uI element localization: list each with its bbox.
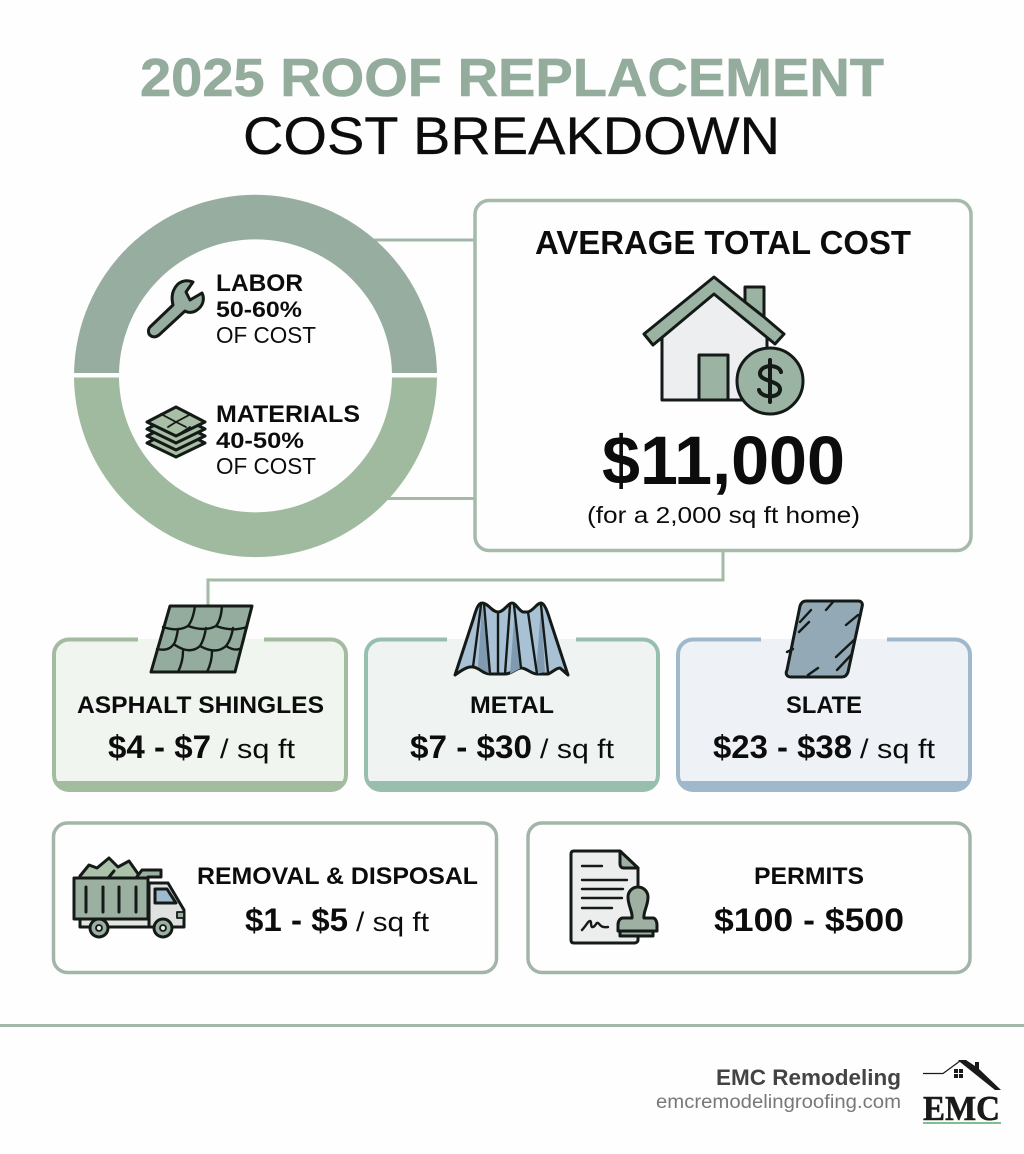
text: labor share: 50-60% <box>216 297 302 322</box>
panel: asphalt shingles <box>54 606 346 791</box>
price: metal: $7 - $30 <box>410 729 532 765</box>
icon: wrench <box>148 281 203 337</box>
text: labor share <box>216 270 316 348</box>
price: metal <box>410 729 615 765</box>
price: metal: / sq ft <box>540 734 615 764</box>
text: materials share: MATERIALS <box>216 401 360 428</box>
icon: slate tile <box>786 601 862 677</box>
panel: slate <box>678 601 970 791</box>
title <box>140 48 884 166</box>
footer divider <box>0 1024 1024 1027</box>
heading: average total cost: AVERAGE TOTAL COST <box>535 224 911 261</box>
value: total cost: $11,000 <box>602 422 845 499</box>
icon: shingles <box>151 606 252 672</box>
price: asphalt shingles: $4 - $7 <box>108 729 211 765</box>
price: asphalt shingles: / sq ft <box>220 734 296 764</box>
panel: average total cost <box>475 200 971 550</box>
caption: home size: (for a 2,000 sq ft home) <box>587 502 860 528</box>
title: 2025 ROOF REPLACEMENT <box>140 48 884 108</box>
price: slate <box>713 729 936 765</box>
price: removal and disposal: / sq ft <box>356 907 430 937</box>
price: slate: / sq ft <box>860 734 936 764</box>
text: materials share: OF COST <box>216 453 316 479</box>
price: removal and disposal <box>245 902 430 938</box>
icon: metal panel <box>455 603 568 675</box>
footer: company name and website: emcremodelingroofing.com <box>656 1091 901 1113</box>
logo: EMC <box>923 1060 1001 1128</box>
price: permits: $100 - $500 <box>714 902 904 938</box>
donut segment: materials <box>74 378 437 557</box>
heading: permits: PERMITS <box>754 863 864 890</box>
connector lines <box>208 240 723 606</box>
icon: document and stamp <box>571 851 657 943</box>
footer: company name and website <box>656 1065 901 1113</box>
text: materials share <box>216 401 360 479</box>
panel: removal and disposal <box>54 823 496 972</box>
text: labor share: LABOR <box>216 270 303 297</box>
heading: slate: SLATE <box>786 692 862 719</box>
heading: removal and disposal: REMOVAL & DISPOSAL <box>197 863 478 890</box>
footer: company name and website: EMC Remodeling <box>716 1065 901 1090</box>
icon: material stack <box>147 407 205 457</box>
panel: metal <box>366 603 658 791</box>
price: slate: $23 - $38 <box>713 729 852 765</box>
heading: metal: METAL <box>470 692 554 719</box>
heading: asphalt shingles: ASPHALT SHINGLES <box>77 692 324 719</box>
text: labor share: OF COST <box>216 322 316 348</box>
donut segment: labor <box>74 195 437 373</box>
title: COST BREAKDOWN <box>243 107 780 166</box>
donut chart <box>74 195 437 557</box>
icon: dump truck <box>74 858 184 937</box>
panel: permits <box>528 823 970 972</box>
price: asphalt shingles <box>108 729 296 765</box>
text: materials share: 40-50% <box>216 428 304 453</box>
icon: house with dollar coin <box>644 277 803 414</box>
price: removal and disposal: $1 - $5 <box>245 902 348 938</box>
logo: EMC: EMC <box>923 1089 1000 1128</box>
